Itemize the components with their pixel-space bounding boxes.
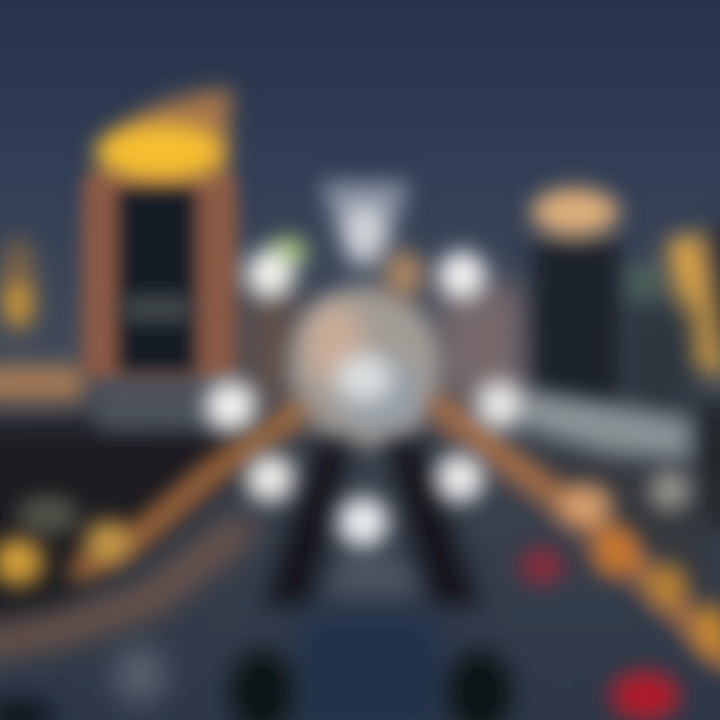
tower mid band bbox=[122, 298, 192, 320]
globe body bbox=[289, 285, 441, 445]
bottom left pale glow bbox=[116, 647, 164, 703]
globe highlight bbox=[336, 354, 392, 402]
tower yellow crown bbox=[96, 124, 224, 180]
top funnel light bbox=[320, 182, 410, 268]
bottom navy road block bbox=[300, 615, 440, 720]
building right of centre bbox=[440, 285, 525, 400]
street ground bbox=[0, 430, 720, 720]
tower roof glow bbox=[98, 88, 232, 175]
central globe bbox=[289, 285, 441, 445]
tower body bbox=[532, 240, 622, 410]
orange finial above globe bbox=[384, 250, 424, 298]
left lower road glow bbox=[0, 530, 240, 645]
left tower base bbox=[95, 382, 225, 430]
tower dark core bbox=[118, 188, 196, 373]
far right golden tower bbox=[666, 232, 720, 378]
tower frame bbox=[82, 170, 238, 380]
right road amber lights bbox=[559, 485, 720, 656]
left orange road bbox=[80, 412, 298, 570]
yellow lights lower left bbox=[0, 497, 130, 584]
dark road lanes bbox=[265, 440, 480, 605]
left small tower bbox=[0, 237, 36, 333]
dark city mass left bbox=[0, 415, 280, 630]
right orange road bbox=[440, 408, 720, 660]
left horizon lights bbox=[0, 366, 85, 400]
tower cap bbox=[531, 188, 619, 236]
white light orbs bbox=[206, 250, 690, 546]
mid right dark buildings bbox=[625, 305, 695, 415]
building left of centre bbox=[245, 290, 300, 400]
bottom dark posts bbox=[0, 650, 512, 720]
globe cool centre bbox=[340, 357, 424, 433]
green glow on left orb bbox=[268, 237, 308, 267]
far right dark building bbox=[695, 225, 720, 530]
right lower buildings bbox=[515, 445, 720, 610]
globe warm left bbox=[305, 303, 365, 387]
central road panel bbox=[325, 558, 420, 595]
right grey terrace band bbox=[520, 390, 690, 462]
red car lights bbox=[520, 548, 679, 720]
left tower bbox=[82, 88, 238, 380]
green glow beside right tower bbox=[628, 265, 662, 305]
right tower bbox=[531, 188, 622, 410]
